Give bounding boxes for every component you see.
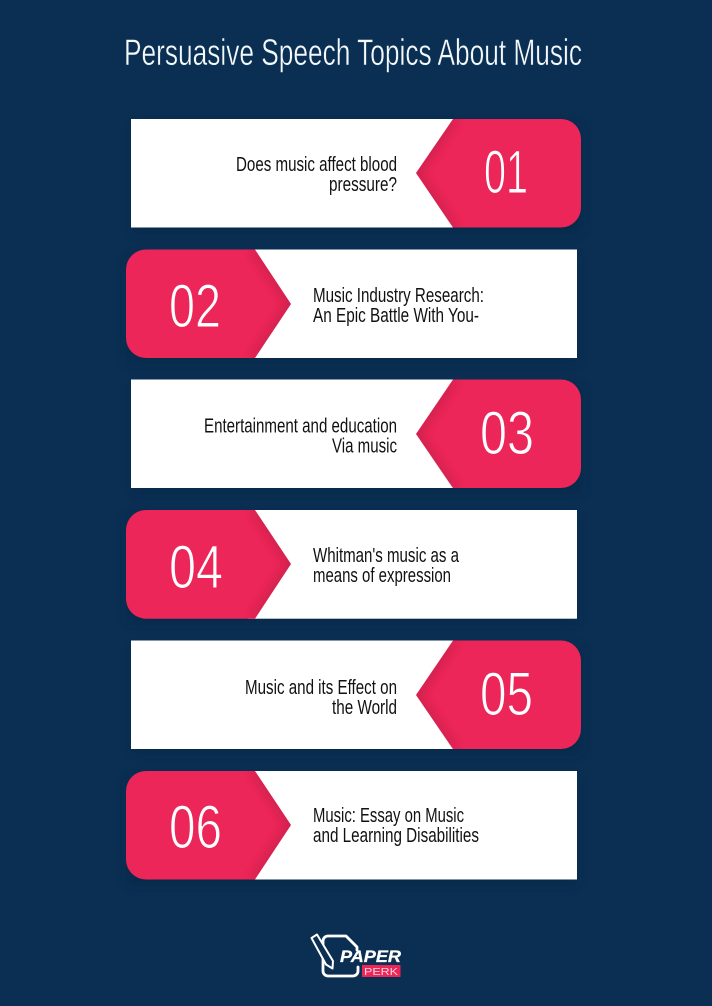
topic text 02 bbox=[313, 284, 484, 327]
icon: document outline bbox=[323, 936, 358, 976]
number 05: 05 bbox=[480, 660, 533, 728]
logo word PAPER: PAPER bbox=[340, 947, 402, 966]
topic text 05 bbox=[245, 676, 397, 719]
card 04 bbox=[126, 510, 577, 623]
topic text 01: pressure? bbox=[329, 173, 397, 196]
number 03: 03 bbox=[480, 399, 534, 467]
card 02 bbox=[126, 250, 577, 362]
card 01 bbox=[131, 119, 581, 232]
topic text 06 bbox=[313, 804, 479, 847]
card 03 bbox=[131, 380, 581, 492]
topic text 03: Via music bbox=[332, 434, 397, 458]
logo: Paper Perk bbox=[312, 934, 402, 978]
topic text 01 bbox=[236, 153, 397, 196]
icon: pencil bbox=[312, 934, 333, 968]
number 02: 02 bbox=[169, 272, 221, 340]
topic text 03 bbox=[204, 414, 397, 458]
card 06 bbox=[126, 771, 577, 884]
topic text 03: Entertainment and education bbox=[204, 414, 397, 438]
topic text 05: the World bbox=[332, 696, 397, 719]
topic text 02: Music Industry Research: bbox=[313, 284, 484, 307]
number 06: 06 bbox=[169, 793, 222, 861]
logo badge PERK: PERK bbox=[364, 966, 398, 978]
topic text 02: An Epic Battle With You- bbox=[313, 304, 479, 327]
card 05 bbox=[131, 640, 581, 753]
topic text 06: and Learning Disabilities bbox=[313, 824, 479, 847]
number 01: 01 bbox=[484, 138, 528, 206]
topic text 04: Whitman's music as a bbox=[313, 544, 459, 567]
topic text 04 bbox=[313, 544, 459, 587]
topic text 05: Music and its Effect on bbox=[245, 676, 397, 699]
number 04: 04 bbox=[169, 533, 223, 601]
topic text 01: Does music affect blood bbox=[236, 153, 397, 176]
topic text 06: Music: Essay on Music bbox=[313, 804, 464, 827]
topic text 04: means of expression bbox=[313, 564, 451, 587]
